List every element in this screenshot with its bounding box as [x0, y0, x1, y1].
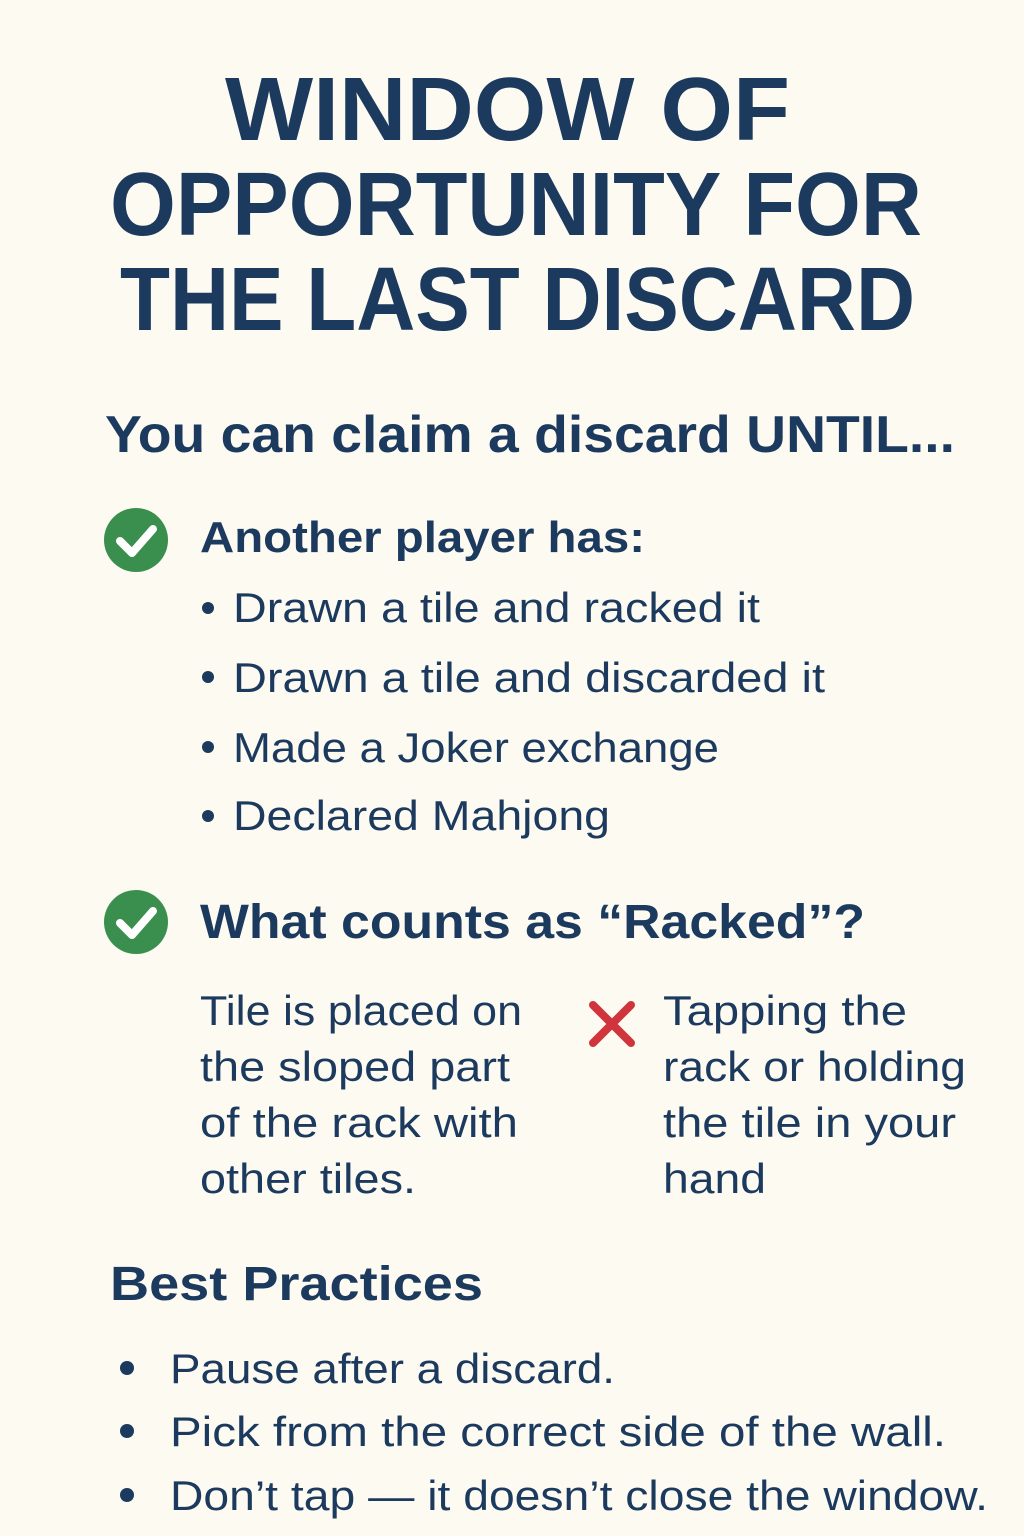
text: racked yes: other tiles. — [200, 1155, 416, 1202]
text: racked yes — [200, 987, 522, 1202]
title: OPPORTUNITY FOR — [110, 155, 922, 255]
text: racked yes: the sloped part — [200, 1043, 510, 1090]
text: racked no: rack or holding — [663, 1043, 966, 1090]
title: WINDOW OF — [225, 60, 790, 160]
bullet list — [202, 584, 825, 839]
bullet list: Made a Joker exchange — [233, 724, 719, 771]
heading: another player has: Another player has: — [200, 513, 645, 562]
text: racked yes: of the rack with — [200, 1099, 518, 1146]
best practices list — [120, 1345, 988, 1519]
best practices list: Pick from the correct side of the wall. — [170, 1408, 946, 1455]
heading: racked: What counts as “Racked”? — [200, 896, 865, 949]
text: racked no: hand — [663, 1155, 766, 1202]
section: best practices — [110, 1258, 988, 1519]
bullet list: Declared Mahjong — [233, 792, 610, 839]
section: another player has — [104, 508, 825, 839]
icon: check 1 — [104, 508, 168, 572]
text: racked yes: Tile is placed on — [200, 987, 522, 1034]
section: racked — [104, 890, 966, 1202]
text: racked no: the tile in your — [663, 1099, 956, 1146]
title — [110, 60, 922, 350]
text: racked no — [663, 987, 966, 1202]
title: THE LAST DISCARD — [120, 250, 915, 350]
bullet list: Drawn a tile and racked it — [233, 584, 760, 631]
subtitle: You can claim a discard UNTIL... — [105, 406, 955, 464]
best practices list: Don’t tap — it doesn’t close the window. — [170, 1472, 988, 1519]
text: racked no: Tapping the — [663, 987, 907, 1034]
icon: red x — [593, 1005, 631, 1043]
heading: best practices: Best Practices — [110, 1258, 483, 1311]
icon: check 2 — [104, 890, 168, 954]
best practices list: Pause after a discard. — [170, 1345, 615, 1392]
bullet list: Drawn a tile and discarded it — [233, 654, 825, 701]
